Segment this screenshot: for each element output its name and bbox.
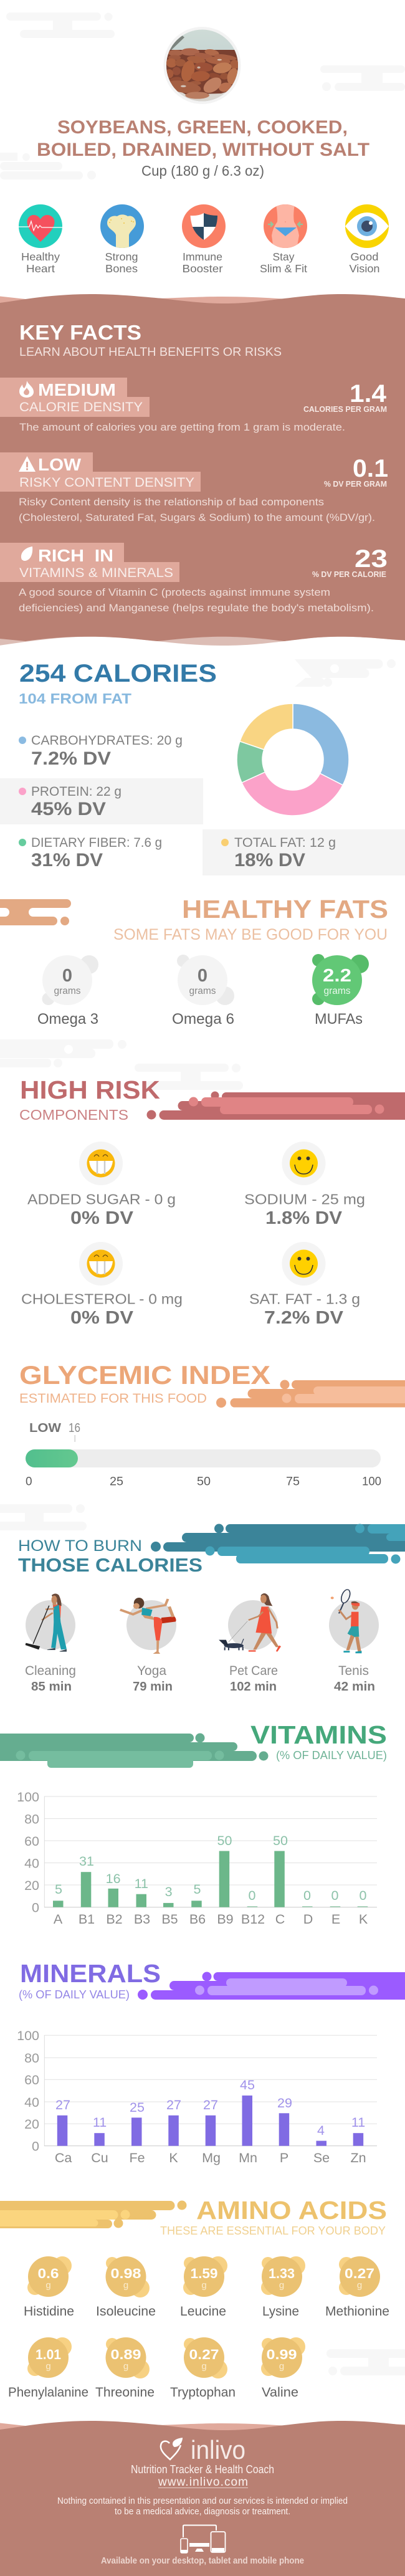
fact: rich in vitamins and minerals: A good source of Vitamin C (protects against immune system	[19, 586, 330, 598]
amino acid: histidine: 0.6	[37, 2266, 59, 2281]
fact: calorie density: CALORIES PER GRAM	[303, 404, 387, 414]
bar chart: minerals: 27	[55, 2097, 70, 2112]
icon: healthy heart	[19, 204, 62, 275]
risk item: cholesterol	[21, 1242, 183, 1328]
panel: glycemic index	[19, 1360, 405, 1488]
bar chart: vitamins: 0	[360, 1888, 367, 1903]
risk item: cholesterol: CHOLESTEROL - 0 mg	[21, 1291, 183, 1307]
legend: total fat	[221, 836, 336, 871]
panel: footer	[0, 2421, 405, 2576]
activity: tennis	[329, 1589, 379, 1694]
risk item: sodium: SODIUM - 25 mg	[244, 1191, 365, 1208]
food photo: beans	[163, 27, 241, 105]
amino acid: phenylalanine: g	[45, 2361, 51, 2372]
icon: immune booster: Booster	[182, 262, 223, 275]
icon: good vision	[345, 204, 389, 275]
fact: risky content density: 0.1	[353, 455, 388, 482]
bar chart: vitamins: 5	[55, 1882, 62, 1897]
legend: dietary fiber	[19, 836, 162, 871]
decorative banner: healthy fats	[0, 899, 71, 925]
tagline: Nutrition Tracker & Health Coach	[131, 2463, 274, 2476]
decorative cloud: amino	[326, 2349, 405, 2375]
bar chart: minerals: Zn	[350, 2150, 366, 2165]
risk item: cholesterol: 0% DV	[70, 1308, 134, 1328]
icon: strong bones: Bones	[105, 262, 138, 275]
heading: healthy fats: HEALTHY FATS	[182, 895, 388, 923]
legend: protein: PROTEIN: 22 g	[31, 785, 122, 799]
legend: total fat: TOTAL FAT: 12 g	[234, 836, 336, 850]
amino acid: leucine: 1.59	[191, 2266, 218, 2281]
fat bubble: mufas: grams	[323, 986, 351, 996]
amino acid: threonine	[95, 2337, 155, 2400]
bar chart: minerals: 60	[24, 2073, 39, 2087]
title	[37, 117, 369, 160]
risk item: sodium: 1.8% DV	[265, 1208, 343, 1228]
risk item: saturated fat: SAT. FAT - 1.3 g	[249, 1291, 360, 1307]
gauge: glycemic level	[26, 1421, 381, 1488]
subheading: calories from fat: 104 FROM FAT	[19, 690, 131, 707]
bar chart: minerals: 20	[24, 2117, 39, 2132]
heading: those calories: THOSE CALORIES	[18, 1554, 202, 1576]
bar chart: vitamins: 50	[217, 1833, 232, 1848]
fact: calorie density: The amount of calories you are getting from 1 gram is moderate.	[19, 421, 345, 433]
bar chart: vitamins: 11	[135, 1876, 148, 1891]
bar chart: vitamins: 50	[273, 1833, 288, 1848]
bar chart: minerals: 11	[93, 2115, 107, 2130]
bar chart: minerals: Mn	[239, 2150, 257, 2165]
fact: calorie density: CALORIE DENSITY	[19, 399, 143, 414]
amino acid: tryptophan: Tryptophan	[170, 2385, 236, 2400]
amino acid: lysine: g	[279, 2280, 284, 2291]
bar chart: vitamins: 40	[24, 1856, 39, 1871]
icon: immune booster: Immune	[183, 250, 222, 263]
amino acid: valine: 0.99	[267, 2347, 297, 2362]
decorative banner: amino acids	[0, 2201, 187, 2228]
bar chart: vitamins: 16	[106, 1871, 121, 1886]
risk item: saturated fat: 7.2% DV	[264, 1308, 344, 1328]
icon: stay slim and fit: Stay	[273, 250, 295, 263]
activity: pet care	[219, 1593, 281, 1694]
fat bubble: omega 3: 0	[62, 966, 72, 986]
activity: pet care: Pet Care	[229, 1664, 278, 1678]
amino acid: lysine: 1.33	[269, 2266, 295, 2281]
risk item: added sugar: ADDED SUGAR - 0 g	[27, 1191, 176, 1208]
amino acid: methionine: g	[357, 2280, 362, 2291]
bar chart: minerals	[17, 2028, 377, 2165]
icon: good vision: Vision	[349, 262, 380, 275]
amino acid: leucine	[180, 2256, 227, 2319]
gauge: glycemic level: 16	[69, 1421, 80, 1435]
disclaimer: Nothing contained in this presentation and our services is intended or implied	[57, 2496, 348, 2506]
panel: how to burn those calories	[18, 1524, 405, 1694]
activity: pet care: 102 min	[230, 1680, 277, 1694]
fat bubble: omega 6: 0	[198, 966, 207, 986]
bar chart: vitamins: 80	[24, 1812, 39, 1827]
bar chart: vitamins: B3	[134, 1912, 150, 1927]
amino acid: lysine: Lysine	[262, 2304, 299, 2319]
legend: dietary fiber: 31% DV	[31, 850, 103, 871]
amino acid: threonine: 0.89	[111, 2347, 141, 2362]
amino acid: histidine: g	[45, 2280, 51, 2291]
serving size: Cup (180 g / 6.3 oz)	[141, 163, 264, 179]
heading: glycemic index: GLYCEMIC INDEX	[19, 1360, 270, 1390]
availability note: Available on your desktop, tablet and mobile phone	[101, 2555, 304, 2566]
gauge: glycemic level: 75	[286, 1476, 300, 1488]
activity: yoga: 79 min	[133, 1680, 173, 1694]
decorative banner: burn	[151, 1524, 405, 1564]
bar chart: vitamins: B6	[189, 1912, 206, 1927]
amino acid: methionine: 0.27	[345, 2266, 374, 2281]
heading: amino acids: AMINO ACIDS	[196, 2196, 387, 2225]
amino acid: phenylalanine	[8, 2337, 88, 2400]
risk item: added sugar: 0% DV	[70, 1208, 134, 1228]
bar chart: vitamins: 100	[17, 1790, 39, 1805]
risk item: added sugar	[27, 1142, 176, 1228]
fact: risky content density: % DV PER GRAM	[324, 479, 387, 489]
subheading: healthy fats: SOME FATS MAY BE GOOD FOR YOU	[113, 926, 388, 943]
bar chart: vitamins: D	[303, 1912, 313, 1927]
legend: carbohydrates: CARBOHYDRATES: 20 g	[31, 733, 183, 748]
heading: key facts: KEY FACTS	[19, 322, 141, 345]
decorative clouds: header	[0, 12, 405, 179]
fact: risky content density: LOW	[38, 455, 81, 474]
fact: calorie density: 1.4	[350, 380, 387, 408]
bar chart: minerals: K	[169, 2150, 178, 2165]
fat bubble: omega 3	[37, 955, 98, 1028]
amino acid: threonine: g	[123, 2361, 128, 2372]
bar chart: vitamins: B2	[106, 1912, 123, 1927]
legend: carbohydrates: 7.2% DV	[31, 748, 111, 769]
bar chart: minerals: Se	[313, 2150, 330, 2165]
fact: rich in vitamins and minerals: RICH IN	[38, 546, 113, 565]
amino acid: isoleucine: Isoleucine	[96, 2304, 156, 2319]
panel: key facts	[0, 294, 405, 646]
activity: tennis: 42 min	[334, 1680, 375, 1694]
panel: minerals	[17, 1959, 405, 2165]
fact: rich in vitamins and minerals: 23	[355, 545, 388, 573]
fat bubble: omega 3: grams	[54, 986, 81, 996]
bar chart: minerals: 100	[17, 2028, 39, 2043]
fact: calorie density: MEDIUM	[38, 380, 116, 399]
gauge: glycemic level: LOW	[29, 1421, 61, 1435]
bar chart: vitamins: B12	[241, 1912, 265, 1927]
amino acid: tryptophan: 0.27	[189, 2347, 219, 2362]
panel: healthy fats	[0, 895, 388, 1028]
bar chart: vitamins: B9	[217, 1912, 234, 1927]
decorative banner: vitamins	[0, 1734, 268, 1768]
bar chart: vitamins: B5	[161, 1912, 178, 1927]
logo: inlivo	[161, 2435, 245, 2464]
bar chart: vitamins: K	[359, 1912, 368, 1927]
amino acid: valine: g	[279, 2361, 284, 2372]
bar chart: minerals: 80	[24, 2051, 39, 2066]
amino acid: phenylalanine: Phenylalanine	[8, 2385, 88, 2400]
activity: tennis: Tenis	[338, 1664, 369, 1678]
bar chart: minerals: Cu	[91, 2150, 108, 2165]
bar chart: minerals: Fe	[129, 2150, 145, 2165]
donut chart	[237, 704, 349, 816]
panel: vitamins	[0, 1720, 387, 1927]
subheading: minerals: (% OF DAILY VALUE)	[19, 1988, 130, 2001]
panel: high risk components	[19, 1076, 405, 1328]
gauge: glycemic level: 25	[110, 1476, 123, 1488]
fat bubble: mufas: MUFAs	[315, 1011, 363, 1028]
title: SOYBEANS, GREEN, COOKED,	[57, 117, 348, 138]
icon: good vision: Good	[350, 250, 379, 263]
decorative banner: high risk	[147, 1092, 405, 1120]
icon: healthy heart: Healthy	[21, 250, 60, 263]
icon: immune booster	[182, 204, 226, 275]
bar chart: minerals: 45	[240, 2077, 255, 2092]
gauge: glycemic level: 0	[26, 1476, 32, 1488]
bar chart: vitamins: 0	[32, 1901, 39, 1915]
benefit icons row	[19, 204, 389, 275]
bar chart: minerals: Mg	[202, 2150, 221, 2165]
heading: calories: 254 CALORIES	[19, 660, 217, 687]
gauge: glycemic level: 50	[197, 1476, 211, 1488]
decorative banner: minerals	[138, 1972, 405, 2000]
amino acid: leucine: g	[201, 2280, 207, 2291]
activity: yoga: Yoga	[137, 1664, 166, 1678]
fact: rich in vitamins and minerals: % DV PER CALORIE	[312, 570, 386, 579]
risk item: sodium	[244, 1142, 365, 1228]
fat bubble: omega 6: Omega 6	[172, 1011, 234, 1028]
fact: rich in vitamins and minerals: VITAMINS & MINERALS	[19, 565, 173, 580]
icon: stay slim and fit: Slim & Fit	[260, 262, 307, 275]
fact: risky content density	[0, 452, 388, 523]
bar chart: minerals: 4	[317, 2123, 325, 2138]
subheading: components: COMPONENTS	[19, 1107, 128, 1123]
fat bubble: omega 6: grams	[189, 986, 216, 996]
activity: cleaning: Cleaning	[25, 1664, 76, 1678]
subheading: key facts: LEARN ABOUT HEALTH BENEFITS OR RISKS	[19, 346, 282, 359]
legend: carbohydrates	[19, 733, 183, 769]
gauge: glycemic level: 100	[362, 1476, 381, 1488]
panel: calories	[0, 659, 405, 875]
bar chart: vitamins: A	[54, 1912, 63, 1927]
amino acid: tryptophan	[170, 2337, 236, 2400]
icon: healthy heart: Heart	[26, 262, 55, 275]
bar chart: minerals: 27	[166, 2097, 181, 2112]
amino acid: leucine: Leucine	[180, 2304, 226, 2319]
decorative banner: glycemic index	[216, 1380, 405, 1408]
fat bubble: mufas	[312, 954, 369, 1028]
bar chart: minerals: 27	[203, 2097, 218, 2112]
website link: www.inlivo.com	[158, 2476, 248, 2489]
bar chart: vitamins: E	[331, 1912, 340, 1927]
amino acid: isoleucine: g	[123, 2280, 128, 2291]
activity: cleaning: 85 min	[31, 1680, 72, 1694]
activity: yoga	[120, 1598, 176, 1694]
bar chart: vitamins: C	[275, 1912, 285, 1927]
fact: rich in vitamins and minerals	[0, 543, 388, 614]
amino acid: lysine	[261, 2256, 305, 2319]
icon: strong bones	[100, 204, 144, 275]
amino acid: methionine: Methionine	[325, 2304, 389, 2319]
icon: strong bones: Strong	[105, 250, 138, 263]
activity: cleaning	[25, 1593, 76, 1694]
amino acid: valine	[261, 2337, 305, 2400]
fact: risky content density: RISKY CONTENT DENSITY	[19, 475, 194, 490]
bar chart: vitamins: 0	[249, 1888, 256, 1903]
risk item: saturated fat	[249, 1242, 360, 1328]
amino acid: phenylalanine: 1.01	[36, 2347, 61, 2362]
fat bubble: omega 6	[172, 955, 234, 1028]
bar chart: vitamins: 20	[24, 1878, 39, 1893]
subheading: vitamins: (% OF DAILY VALUE)	[276, 1748, 387, 1762]
bar chart: vitamins: B1	[79, 1912, 95, 1927]
bar chart: vitamins: 60	[24, 1834, 39, 1849]
heading: vitamins: VITAMINS	[250, 1720, 387, 1749]
bar chart: minerals: 29	[277, 2096, 292, 2111]
fact: risky content density: (Cholesterol, Saturated Fat, Sugars & Sodium) to the amount (%DV/gr).	[19, 512, 375, 523]
legend: total fat: 18% DV	[234, 850, 305, 871]
bar chart: vitamins: 0	[331, 1888, 339, 1903]
heading: minerals: MINERALS	[20, 1959, 161, 1988]
fact: calorie density	[0, 378, 387, 433]
bar chart: vitamins: 3	[165, 1884, 173, 1899]
fact: rich in vitamins and minerals: deficiencies) and Manganese (helps regulate the body's metabolism).	[19, 602, 374, 614]
fact: risky content density: Risky Content density is the relationship of bad components	[19, 496, 324, 508]
fat bubble: omega 3: Omega 3	[37, 1011, 98, 1028]
amino acid: valine: Valine	[262, 2385, 298, 2400]
panel: amino acids	[0, 2196, 389, 2400]
decorative cloud: burn	[0, 1504, 87, 1530]
bar chart: minerals: P	[280, 2150, 288, 2165]
icon: stay slim and fit	[260, 204, 307, 275]
decorative clouds: high risk	[0, 1039, 243, 1090]
bar chart: minerals: 25	[130, 2100, 145, 2115]
amino acid: histidine	[24, 2256, 74, 2319]
bar chart: vitamins: 5	[194, 1882, 201, 1897]
legend: dietary fiber: DIETARY FIBER: 7.6 g	[31, 836, 162, 850]
heading: how to burn: HOW TO BURN	[18, 1537, 142, 1555]
bar chart: minerals: 0	[32, 2139, 39, 2154]
amino acid: methionine	[325, 2256, 389, 2319]
logo: inlivo: inlivo	[191, 2435, 245, 2464]
bar chart: minerals: 40	[24, 2095, 39, 2110]
amino acid: isoleucine	[96, 2256, 156, 2319]
amino acid: histidine: Histidine	[24, 2304, 74, 2319]
amino acid: isoleucine: 0.98	[111, 2266, 141, 2281]
amino acid: threonine: Threonine	[95, 2385, 155, 2400]
legend: protein	[19, 785, 122, 819]
title: BOILED, DRAINED, WITHOUT SALT	[37, 140, 369, 160]
disclaimer	[57, 2496, 348, 2517]
subheading: estimated: ESTIMATED FOR THIS FOOD	[19, 1391, 207, 1406]
legend: protein: 45% DV	[31, 799, 106, 819]
bar chart: vitamins: 0	[303, 1888, 311, 1903]
bar chart: vitamins: 31	[79, 1854, 94, 1869]
subheading: amino acids: THESE ARE ESSENTIAL FOR YOUR BODY	[160, 2224, 386, 2237]
bar chart: minerals: Ca	[55, 2150, 72, 2165]
bar chart: vitamins	[17, 1790, 377, 1927]
icon: devices	[181, 2525, 226, 2553]
heading: high risk: HIGH RISK	[20, 1076, 160, 1104]
fat bubble: mufas: 2.2	[323, 966, 351, 986]
amino acid: tryptophan: g	[201, 2361, 207, 2372]
disclaimer: to be a medical advice, diagnosis or treatment.	[115, 2506, 290, 2517]
bar chart: minerals: 11	[351, 2115, 365, 2130]
